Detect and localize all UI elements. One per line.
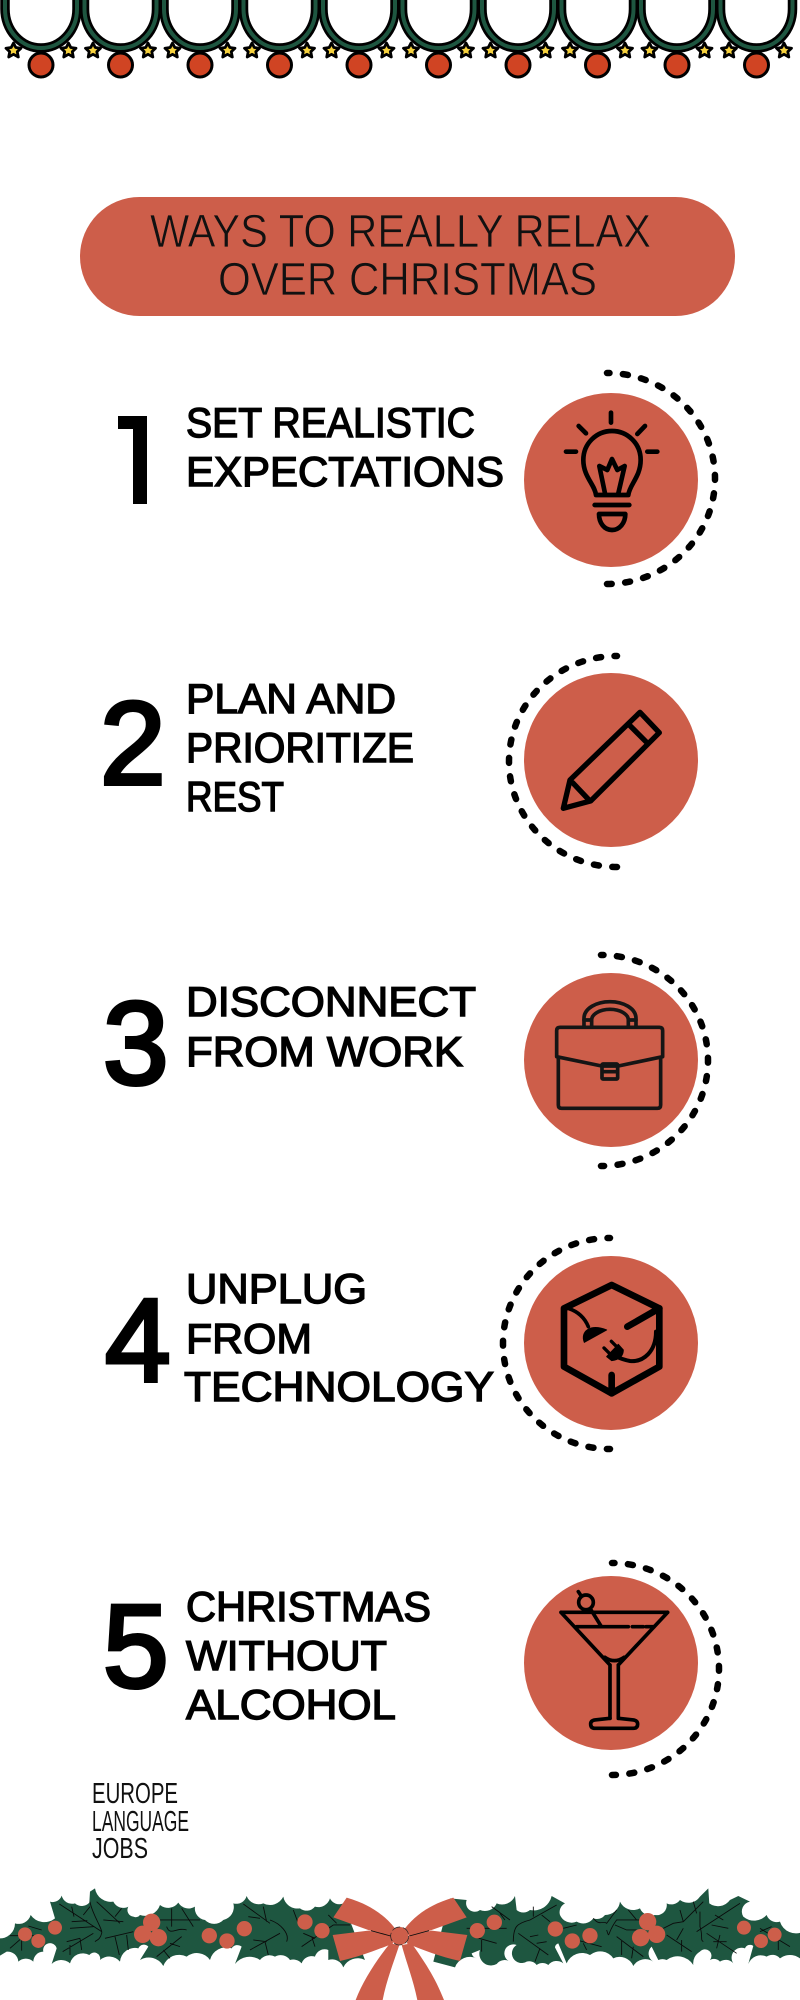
heading 2: PRIORITIZE <box>186 724 414 771</box>
heading 2 <box>186 675 414 820</box>
red bow <box>333 1898 467 2000</box>
dashed arc 2 <box>509 656 617 867</box>
title banner: OVER CHRISTMAS <box>218 253 597 305</box>
holly garland <box>0 1888 800 2000</box>
dashed arc 1 <box>607 373 715 584</box>
circle 1 <box>524 393 698 567</box>
heading 2: PLAN AND <box>186 675 396 722</box>
circle 5 <box>524 1576 698 1750</box>
heading 1: SET REALISTIC <box>186 399 475 446</box>
circle 3 <box>524 973 698 1147</box>
number 1: 1 <box>103 396 169 528</box>
item 4 <box>105 1238 698 1449</box>
heading 3: FROM WORK <box>186 1028 463 1075</box>
item 5 <box>103 1563 719 1775</box>
number 5: 5 <box>103 1581 169 1713</box>
logo: Europe Language Jobs: LANGUAGE <box>92 1806 189 1838</box>
circle 4 <box>524 1256 698 1430</box>
dashed arc 4 <box>503 1238 610 1449</box>
heading 5: CHRISTMAS <box>186 1583 431 1630</box>
icon: unplugged cube <box>564 1285 659 1393</box>
dashed arc 3 <box>601 955 708 1166</box>
top garland <box>5 0 792 77</box>
icon: briefcase <box>557 1002 663 1108</box>
heading 4 <box>184 1265 494 1410</box>
number 3: 3 <box>103 978 169 1110</box>
icon: martini glass <box>561 1592 668 1728</box>
number 2: 2 <box>100 678 166 810</box>
heading 5: ALCOHOL <box>186 1681 396 1728</box>
item 2 <box>100 656 698 867</box>
dashed arc 5 <box>612 1563 719 1775</box>
item 3 <box>103 955 708 1166</box>
icon: light bulb <box>566 413 657 530</box>
title banner <box>80 197 735 316</box>
heading 3 <box>186 978 476 1075</box>
heading 4: UNPLUG <box>186 1265 367 1312</box>
circle 2 <box>524 673 698 847</box>
logo: Europe Language Jobs <box>92 1778 189 1865</box>
heading 2: REST <box>186 773 284 820</box>
left holly leaves <box>0 1888 365 1967</box>
heading 1: EXPECTATIONS <box>186 448 504 495</box>
number 4: 4 <box>105 1275 171 1407</box>
heading 5: WITHOUT <box>186 1632 387 1679</box>
logo: Europe Language Jobs: JOBS <box>92 1833 148 1865</box>
title banner: WAYS TO REALLY RELAX <box>150 205 651 257</box>
icon: pencil <box>563 712 659 808</box>
logo: Europe Language Jobs: EUROPE <box>92 1778 178 1810</box>
heading 1 <box>186 399 504 495</box>
item 1 <box>103 373 715 584</box>
heading 4: TECHNOLOGY <box>184 1363 494 1410</box>
number 1 <box>118 416 147 504</box>
heading 5 <box>186 1583 431 1728</box>
heading 3: DISCONNECT <box>186 978 476 1025</box>
right holly leaves <box>333 1888 800 2000</box>
heading 4: FROM <box>186 1315 312 1362</box>
